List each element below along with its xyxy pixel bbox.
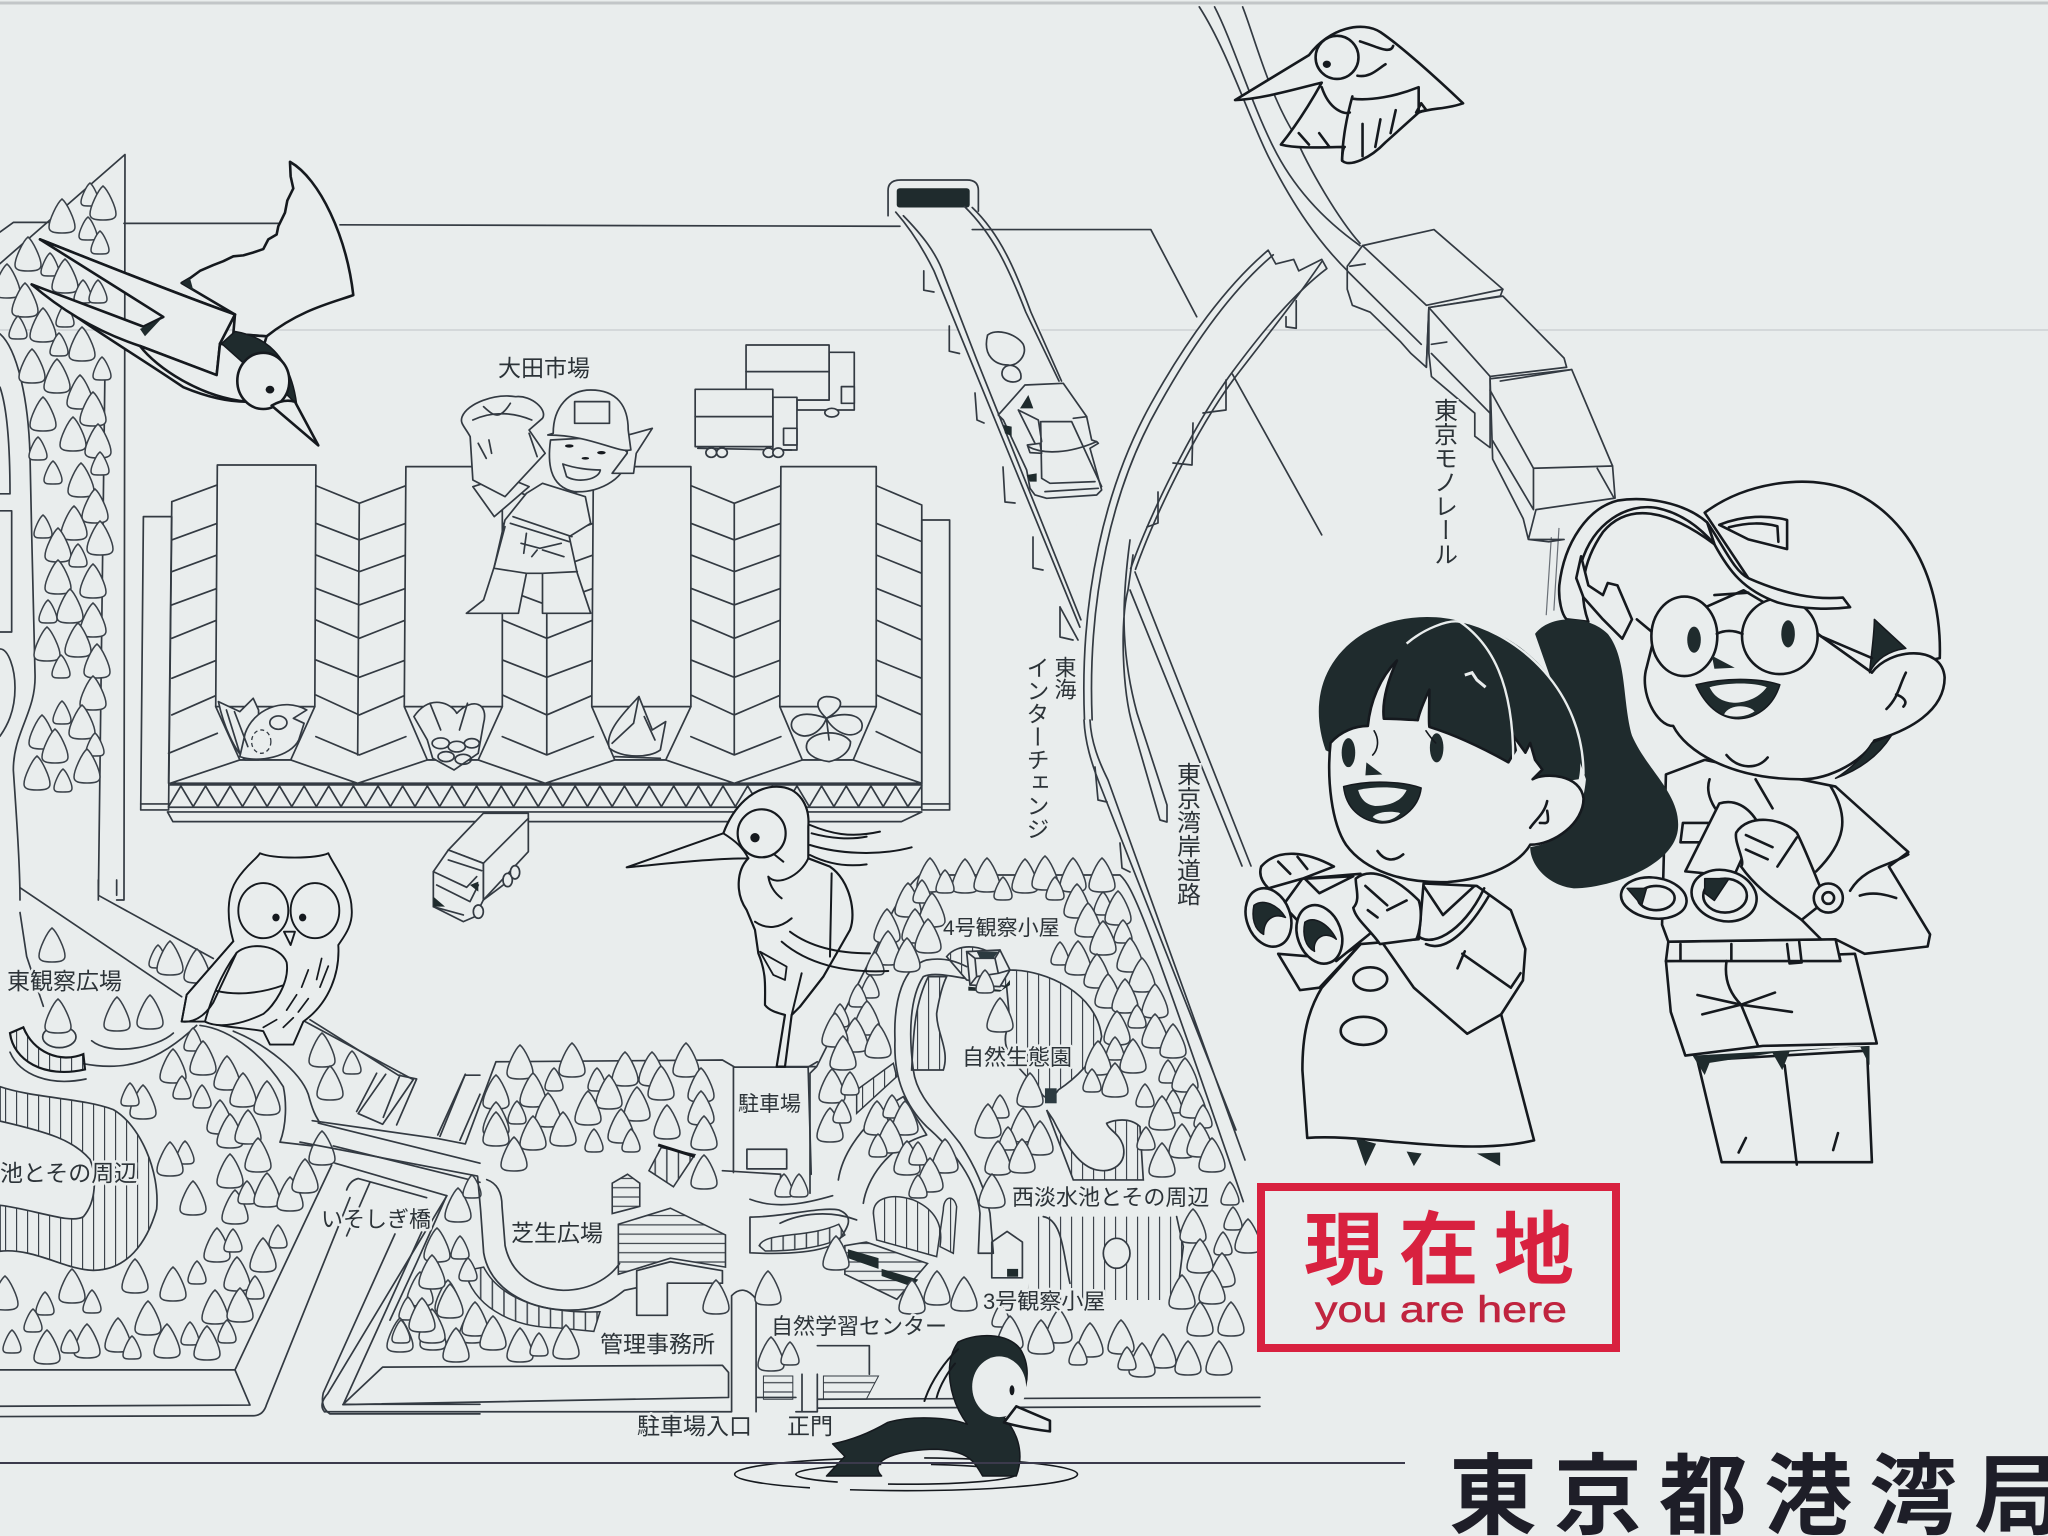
girl hair cap: [1319, 617, 1580, 789]
illustration: kingfisher: [1235, 27, 1463, 163]
label: lawn plaza: 芝生広場: [511, 1220, 603, 1246]
map: forest trees east: [817, 856, 1261, 1377]
chart-like: Ota market building: [141, 465, 950, 822]
label: interchange: インターチェンジ: [1023, 656, 1049, 840]
illustration: market worker holding cabbage: [461, 390, 652, 613]
boy binoculars and hand: [1618, 802, 1843, 928]
icon: bamboo shoot emblem: [609, 697, 666, 758]
illustration: flying bird with forked tail: [32, 162, 353, 445]
label: east observation plaza: 東観察広場: [7, 968, 122, 994]
girl face: [1329, 661, 1584, 882]
icon: fish emblem: [218, 698, 307, 760]
label: nature ecology garden: 自然生態園: [962, 1045, 1072, 1070]
label: Tokai: 東海: [1052, 656, 1076, 700]
icon: two parked trucks: [695, 345, 854, 457]
footer rule: [0, 1462, 1405, 1464]
illustration: owl on branch: [182, 853, 352, 1045]
label: main gate: 正門: [787, 1413, 833, 1439]
callout: you are here: you are here: [1315, 1289, 1567, 1330]
icon: Tokyo monorail train: [1347, 230, 1615, 542]
label: Bay Shore Route: 東京湾岸道路: [1172, 762, 1200, 906]
map: highway, tunnel and monorail track: [888, 7, 1559, 720]
map: southwest roads, bridge and pond: [0, 880, 480, 1417]
map: forest trees southwest: [0, 928, 485, 1364]
label: parking entrance: 駐車場入口: [637, 1413, 752, 1439]
label: nature learning center: 自然学習センター: [771, 1314, 947, 1339]
illustration: tufted duck on water: [735, 1336, 1077, 1491]
label: Ota market: 大田市場: [498, 355, 590, 381]
boy shirt and arm: [1662, 760, 1930, 954]
label: observation hut 3: 3号観察小屋: [983, 1289, 1105, 1314]
boy legs: [1693, 1046, 1872, 1165]
map: highway lower sections and pillars: [975, 380, 1251, 1160]
label: management office: 管理事務所: [600, 1331, 715, 1357]
icon: car on highway: [998, 383, 1102, 498]
label: pond surroundings: 池とその周辺: [0, 1160, 137, 1186]
label: Tokyo Monorail: 東京モノレール: [1430, 398, 1458, 566]
boy shorts and belt: [1666, 939, 1877, 1056]
label: parking: 駐車場: [738, 1093, 801, 1116]
girl hair highlights: [1407, 621, 1584, 774]
map: outer boundary and left park roads: [0, 155, 900, 900]
map: central park roads, lawn and buildings: [300, 1019, 1260, 1412]
callout: you are here: 現在地: [1304, 1206, 1589, 1295]
icon: delivery truck under market: [433, 813, 528, 922]
icon: grapes emblem: [414, 702, 485, 770]
illustration: girl with binoculars: [1238, 617, 1678, 1166]
girl dress and arms: [1302, 884, 1534, 1166]
map: forest trees central: [392, 1043, 977, 1371]
label: isoshigi bridge: いそしぎ橋: [321, 1207, 431, 1232]
boy cap and head: [1559, 482, 1945, 779]
map: nature park paths and ponds: [780, 875, 1243, 1300]
label: observation hut 4: 4号観察小屋: [943, 917, 1060, 940]
map: forest trees west: [0, 183, 116, 792]
girl binoculars and hands: [1238, 854, 1421, 990]
girl ponytail: [1530, 619, 1678, 888]
label: west freshwater pond: 西淡水池とその周辺: [1012, 1185, 1209, 1210]
icon: flower emblem: [791, 697, 862, 762]
illustration: egret with plume: [627, 787, 912, 1067]
callout: you are here: [1261, 1187, 1616, 1348]
illustration: boy with binoculars: [1559, 482, 1945, 1165]
icon: observation hut no.4: [967, 950, 1057, 1103]
